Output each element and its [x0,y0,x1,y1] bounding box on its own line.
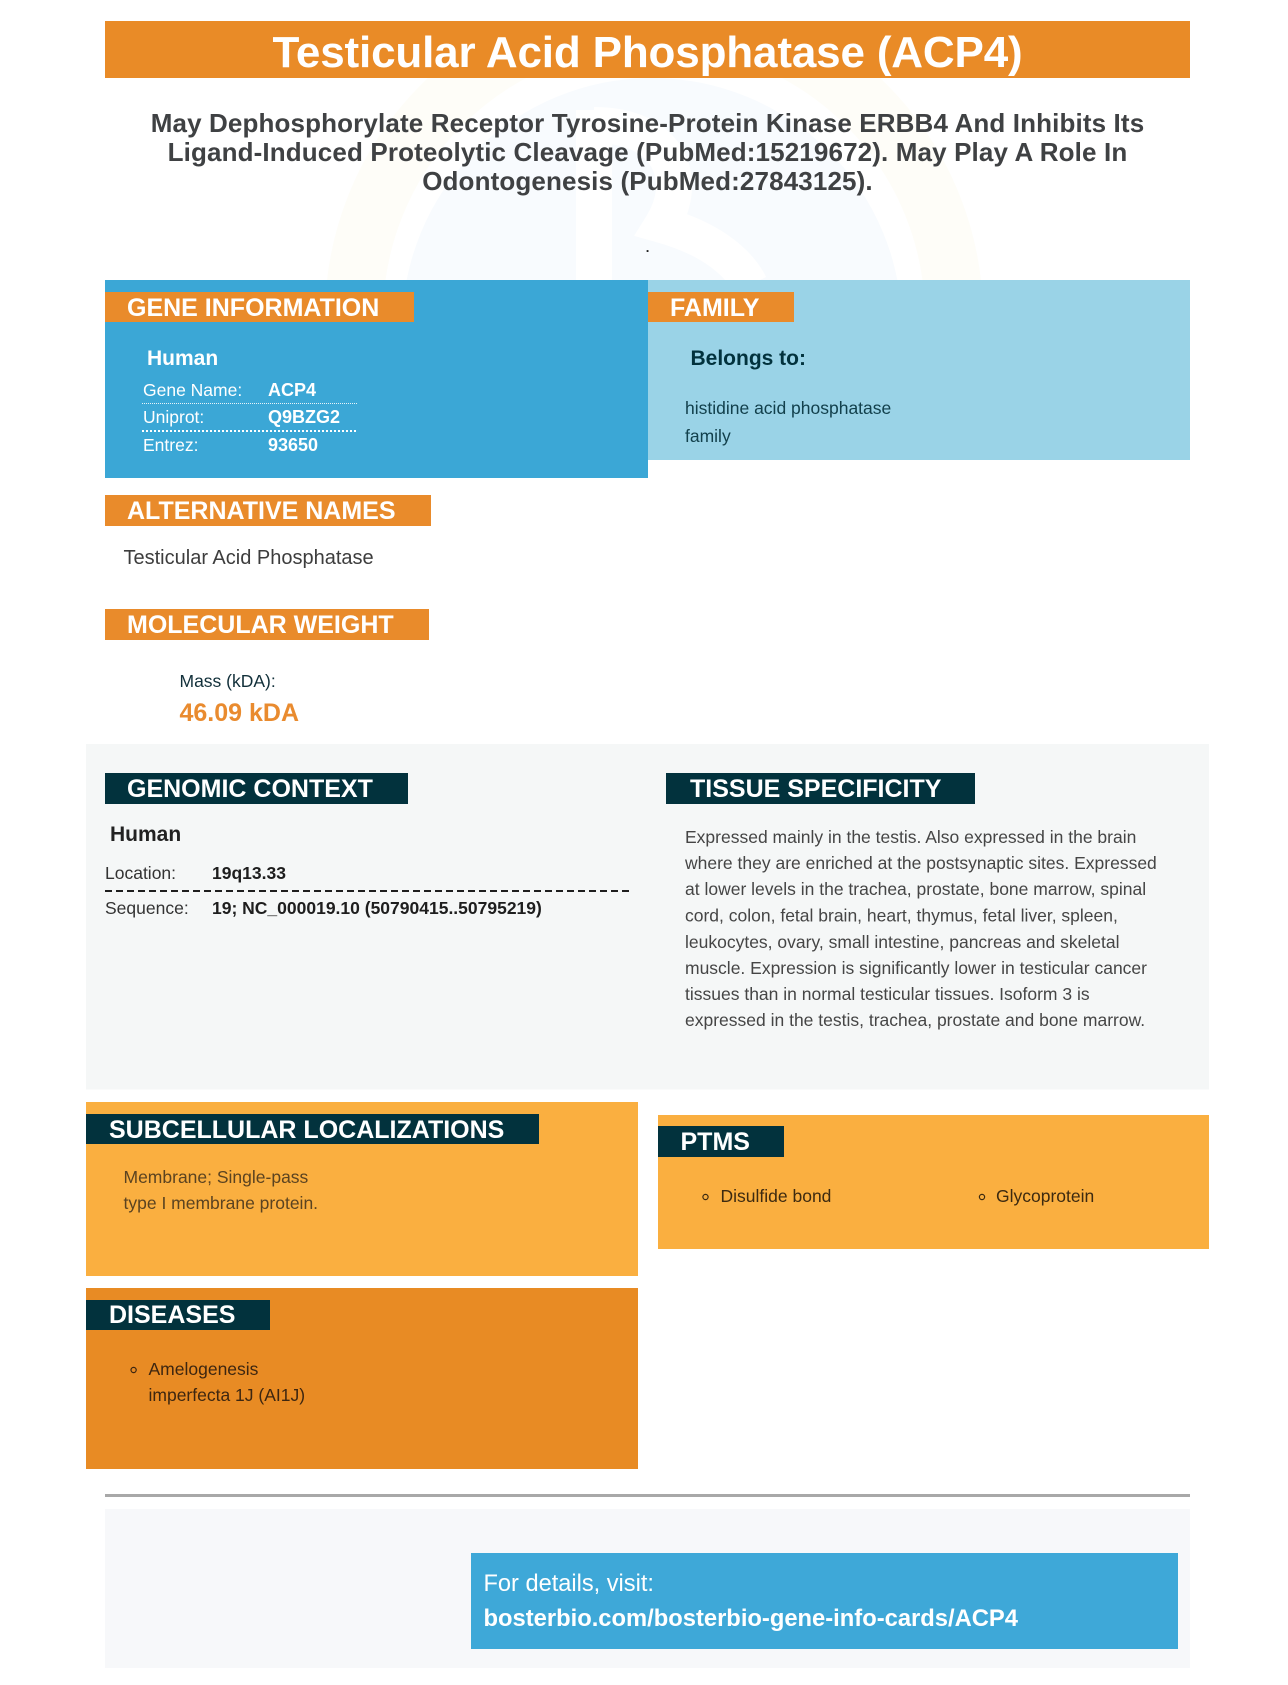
heading: molecular weight: MOLECULAR WEIGHT [127,611,394,639]
heading: diseases [86,1300,270,1330]
heading: tissue specificity: TISSUE SPECIFICITY [690,775,942,803]
PTM list: Glycoprotein [996,1186,1094,1206]
panel: subcellular localizations [86,1102,638,1276]
gene info rows: Entrez: [143,435,198,455]
heading: subcellular localizations: SUBCELLULAR LOCALIZATIONS [109,1116,504,1144]
heading: PTMs [658,1126,784,1157]
tissue specificity text: where they are enriched at the postsynaptic sites. Expressed [684,853,1157,873]
watermark logo [354,17,954,617]
PTM list [703,1186,1094,1206]
gene info rows [142,380,357,455]
tissue specificity text: Expressed mainly in the testis. Also expressed in the brain [685,827,1136,847]
tissue specificity text: muscle. Expression is significantly lower in testicular cancer [685,958,1147,978]
subtitle description: Odontogenesis (PubMed:27843125). [422,166,873,196]
genomic rows: Location: [105,863,176,883]
call to action box [471,1553,1178,1649]
mass label: Mass (kDA): [180,671,276,691]
gene info rows: Gene Name: [143,380,242,400]
panel: diseases [86,1288,638,1469]
alternative name text: Testicular Acid Phosphatase [124,547,374,569]
PTM list: Disulfide bond [720,1186,831,1206]
localization text: type I membrane protein. [124,1193,318,1213]
family text: histidine acid phosphatase [685,398,891,418]
genomic rows: 19q13.33 [212,863,286,883]
genomic rows: 19; NC_000019.10 (50790415..50795219) [212,898,542,918]
subtitle description [151,108,1144,196]
tissue specificity text: expressed in the testis, trachea, prostate and bone marrow. [685,1010,1145,1030]
genomic rows [105,863,630,918]
family label: Belongs to: [690,347,806,370]
gene info rows: Uniprot: [143,407,204,427]
subtitle description: May Dephosphorylate Receptor Tyrosine-Protein Kinase ERBB4 And Inhibits Its [151,108,1144,138]
family text: family [685,426,731,446]
panel: gene information [105,280,648,478]
tissue specificity text: tissues than in normal testicular tissues. Isoform 3 is [685,984,1090,1004]
panel: family [648,280,1190,460]
call to action box: bosterbio.com/bosterbio-gene-info-cards/ACP4 [484,1605,1019,1632]
heading: alternative names: ALTERNATIVE NAMES [127,497,396,525]
small dot text: . [646,240,649,255]
call to action box: For details, visit: [484,1571,654,1597]
panel: PTMs [658,1115,1209,1249]
species label: Human [110,823,181,846]
heading: diseases: DISEASES [109,1301,235,1329]
mass value: 46.09 kDA [180,699,299,727]
disease list: imperfecta 1J (AI1J) [148,1385,305,1405]
gene info rows: 93650 [268,435,318,455]
heading: family [648,292,794,322]
species label: Human [147,347,218,370]
panel: genomic context and tissue specificity [86,744,1209,1090]
heading: gene information: GENE INFORMATION [127,294,379,322]
heading: family: FAMILY [670,294,760,322]
subtitle description: Ligand-Induced Proteolytic Cleavage (PubMed:15219672). May Play A Role In [168,137,1127,167]
footer panel [105,1509,1190,1668]
heading: genomic context: GENOMIC CONTEXT [127,775,373,803]
disease list [131,1359,305,1405]
tissue specificity text: leukocytes, ovary, small intestine, pancreas and skeletal [685,932,1119,952]
genomic rows: Sequence: [105,898,189,918]
gene info rows: Q9BZG2 [268,407,340,427]
tissue specificity text: cord, colon, fetal brain, heart, thymus, fetal liver, spleen, [685,906,1118,926]
heading: PTMs: PTMS [680,1128,750,1156]
disease list: Amelogenesis [148,1359,259,1379]
localization text: Membrane; Single-pass [124,1167,309,1187]
panel: molecular weight [105,609,429,727]
gene info rows: ACP4 [268,380,316,400]
tissue specificity text: at lower levels in the trachea, prostate, bone marrow, spinal [685,879,1146,899]
localization text [124,1167,318,1213]
family text [685,398,891,446]
tissue specificity text [684,827,1157,1030]
title banner: Testicular Acid Phosphatase (ACP4) [272,28,1023,77]
title banner [105,21,1190,78]
panel: alternative names [105,495,431,569]
